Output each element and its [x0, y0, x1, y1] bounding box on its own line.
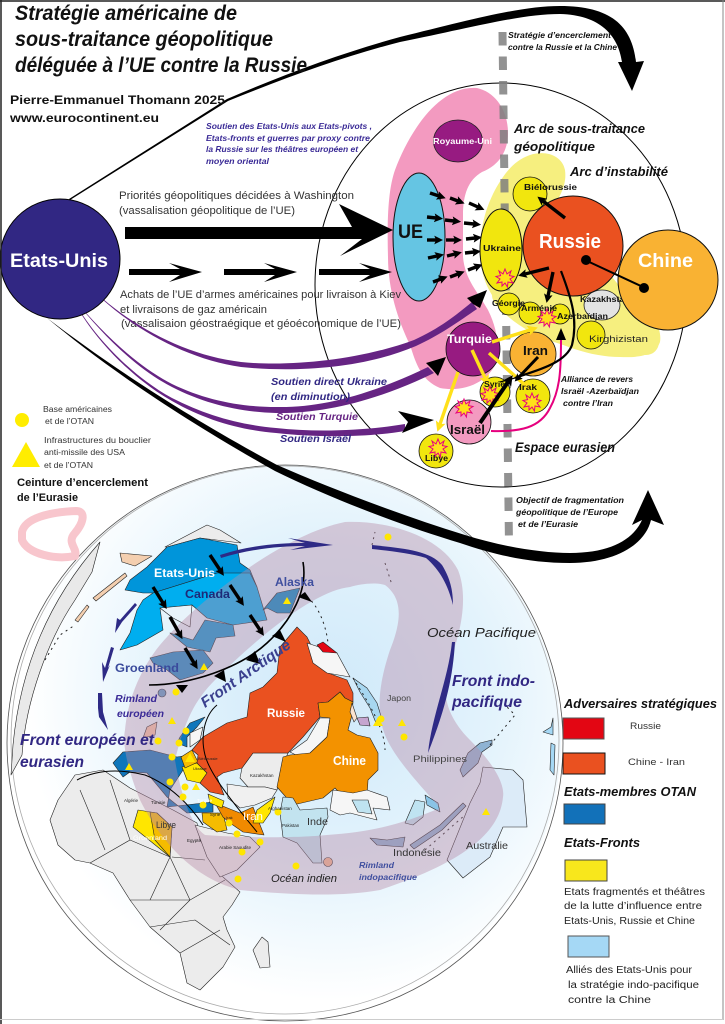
land: Scandinavia	[177, 717, 205, 747]
conflict bursts	[429, 269, 556, 457]
circle labels: Irak	[519, 383, 538, 392]
swatch: front states	[565, 860, 607, 881]
land: Kazakhstan	[240, 753, 288, 790]
map labels: Océan indien	[271, 873, 337, 885]
land: Libya	[133, 810, 172, 857]
small states of the arc	[498, 293, 605, 349]
circle labels: Syrie	[484, 380, 506, 389]
belt legend heading: Ceinture d’encerclement	[17, 477, 148, 489]
actor: Chine: Chine	[638, 251, 693, 272]
arrows: Russia influence	[515, 201, 643, 378]
base label: et de l’OTAN	[45, 417, 94, 426]
note: reverse alliance: Alliance de revers	[560, 374, 633, 384]
land: Siberia east	[307, 643, 350, 677]
Russia China link nodes	[581, 255, 649, 293]
land: Java Sumatra	[370, 837, 405, 847]
shield label: anti-missile des USA	[44, 448, 126, 457]
label: allies: Alliés des Etats-Unis pour	[566, 965, 693, 976]
swatch: Chine Iran	[563, 753, 605, 774]
map labels: Turquie	[197, 798, 213, 803]
map labels: Océan Pacifique	[427, 625, 536, 640]
land: Africa	[50, 770, 240, 990]
author and website: www.eurocontinent.eu	[9, 111, 159, 125]
Eurasian space ellipse	[315, 83, 687, 487]
text: EU purchases: et livraisons de gaz américain	[120, 304, 267, 316]
map labels: Front Arctique	[198, 637, 294, 711]
text: Washington priorities: (vassalisation géopolitique de l’UE)	[119, 205, 295, 217]
bottom encirclement arrow	[47, 318, 664, 563]
map labels: Irak	[226, 815, 233, 820]
land: Caribbean islands	[75, 553, 152, 622]
actor: Israël	[447, 400, 491, 444]
map labels	[20, 566, 536, 885]
arrow: geopolitical priorities	[125, 204, 393, 256]
icon: shield triangle	[12, 442, 40, 467]
top encirclement arrow	[69, 6, 644, 200]
main title: Stratégie américaine de	[15, 2, 237, 25]
land: Iran	[215, 803, 264, 835]
support labels: (en diminution)	[271, 391, 351, 403]
land: Sri Lanka	[324, 858, 332, 866]
land: African borders	[80, 780, 230, 953]
label: Chine Iran: Chine - Iran	[628, 757, 685, 768]
heading: encirclement strategy: contre la Russie et la Chine	[508, 42, 617, 52]
land: Europe NATO	[113, 750, 213, 813]
heading: front states: Etats-Fronts	[564, 835, 640, 850]
land: Alaska	[263, 588, 300, 613]
map labels: Rimland	[359, 861, 395, 870]
map labels: Groenland	[133, 835, 167, 842]
circle labels: Géorgie	[492, 299, 526, 308]
map labels: Inde	[307, 817, 328, 828]
heading: strategic adversaries: Adversaires stratégiques	[563, 696, 717, 711]
map labels: Front européen et	[20, 732, 155, 749]
circle labels: Israël	[450, 422, 485, 437]
land: USA	[125, 538, 257, 593]
map labels: Etats-Unis	[154, 566, 215, 580]
Georgie	[498, 293, 520, 315]
land: Caucasus	[208, 794, 224, 808]
label: front states: Etats fragmentés et théâtres	[564, 887, 705, 898]
actor: Etats-Unis: Etats-Unis	[10, 251, 108, 272]
Eurasian encirclement belt	[124, 522, 503, 895]
subcontracting arc	[388, 88, 508, 389]
support labels: Soutien Israël	[280, 433, 352, 445]
circle labels	[425, 183, 648, 463]
land: Iceland	[158, 689, 166, 697]
actor: UE	[393, 173, 445, 301]
map labels: Canada	[185, 587, 230, 601]
label: allies: contre la Chine	[568, 995, 652, 1006]
land: Philippines	[425, 795, 440, 812]
map labels: Arabie Saoudite	[219, 845, 252, 850]
map labels: Australie	[466, 841, 508, 852]
land: Russia	[192, 627, 353, 795]
swatch: Russie	[563, 718, 604, 739]
land: Papua	[460, 740, 492, 777]
land: Ukraine	[182, 763, 207, 783]
heading: arc of instability: Arc d’instabilité	[569, 164, 668, 179]
heading: Eurasian space: Espace eurasien	[515, 439, 615, 455]
text: EU purchases: (vassalisaion géostraégique et géoéconomique de l’UE)	[121, 318, 401, 330]
circle labels: Arménie	[521, 304, 558, 313]
land: Afghanistan	[253, 797, 275, 823]
map labels: Biélorussie	[198, 756, 218, 761]
note: proxy wars: moyen oriental	[206, 156, 270, 166]
land: Indochina	[330, 790, 390, 820]
actor: Kazakhstan	[580, 290, 630, 320]
map labels: Russie	[267, 706, 305, 720]
arrow: support to Israel	[68, 283, 434, 436]
note: proxy wars: Etats-fronts et guerres par proxy contre	[206, 133, 370, 143]
support labels: Soutien Turquie	[276, 411, 358, 423]
map missile shield: triangles	[125, 597, 490, 815]
shield label: Infrastructures du bouclier	[44, 436, 151, 445]
actor: Ukraine	[480, 209, 522, 291]
land: Belarus	[181, 750, 198, 768]
arc of instability	[481, 153, 660, 357]
actor: Russie	[523, 196, 623, 296]
land: Syria Iraq	[202, 813, 227, 832]
Eurasian front line	[203, 705, 257, 832]
map labels: Kazakhstan	[250, 773, 274, 778]
land: Central Asia	[227, 784, 277, 808]
land masses	[11, 525, 555, 990]
map labels: Groenland	[115, 661, 179, 675]
author and website: Pierre-Emmanuel Thomann 2025	[10, 93, 225, 107]
label: allies: la stratégie indo-pacifique	[568, 980, 699, 991]
Kirghizistan	[577, 321, 605, 349]
base label: Base américaines	[43, 405, 112, 414]
support labels	[271, 376, 387, 445]
land: Chukotka	[317, 642, 337, 653]
map labels: pacifique	[451, 694, 522, 711]
map labels: Pakistan	[282, 823, 300, 828]
map labels: Japon	[387, 694, 411, 703]
arrows: purchases	[129, 263, 392, 282]
globe outlines	[7, 465, 563, 1021]
heading: NATO members: Etats-membres OTAN	[564, 784, 697, 799]
land: Libya east	[150, 812, 172, 857]
land: Madagascar	[253, 937, 270, 968]
text: EU purchases: Achats de l’UE d’armes américaines pour livraison à Kiev	[120, 289, 401, 301]
land: China	[277, 692, 378, 805]
actor: Biélorussie	[513, 177, 547, 211]
map labels: Front indo-	[452, 673, 535, 690]
map labels: Iran	[243, 811, 263, 823]
land: Indonesian chain	[410, 803, 466, 849]
actor: Ukraine: Ukraine	[483, 244, 522, 253]
land: Arabia	[195, 825, 260, 877]
map labels: Indonésie	[393, 848, 441, 859]
heading: subcontracting arc: Arc de sous-traitance	[513, 121, 645, 136]
actor: Royaume-Uni	[433, 120, 492, 162]
globe sea disc	[9, 465, 561, 1017]
arrow: Israel Azerbaijan alliance	[491, 328, 566, 431]
land: Greenland	[150, 650, 213, 680]
arrows: Turkey influence	[440, 330, 530, 424]
swatch: allies	[568, 936, 609, 957]
land: India and Pakistan	[280, 797, 328, 863]
Arctic front line with teeth	[149, 562, 312, 693]
heading: encirclement strategy: Stratégie d’encerclement	[508, 30, 612, 40]
actor: Russie: Russie	[539, 231, 601, 253]
land: New Zealand	[543, 718, 555, 775]
black pressure arrows	[153, 555, 260, 663]
actor: Syrie	[480, 377, 510, 407]
land: Mexico	[165, 525, 241, 547]
actor: Etats-Unis	[0, 199, 120, 319]
land: Australia	[447, 767, 527, 878]
icon: base circle	[15, 413, 29, 427]
actor: Irak	[516, 379, 550, 413]
arrows: EU to Ukraine	[427, 193, 478, 282]
note: fragmentation goal: et de l’Eurasie	[518, 519, 578, 529]
heading: subcontracting arc: géopolitique	[513, 139, 595, 154]
circle labels: Libye	[425, 454, 449, 463]
map labels: Syrie	[210, 812, 221, 817]
arrows: Middle East axis	[480, 357, 538, 423]
note: reverse alliance: contre l’Iran	[563, 398, 613, 408]
map labels: Libye	[156, 820, 176, 830]
map labels: Alaska	[275, 575, 314, 589]
note: fragmentation goal: Objectif de fragmentation	[516, 495, 624, 505]
actor: Chine	[618, 230, 718, 330]
map labels: Algérie	[124, 798, 139, 803]
land: Hudson Bay	[160, 605, 192, 627]
island chains	[45, 532, 515, 850]
geopolitical dividing line	[502, 32, 509, 545]
actor: Kazakhstan: Kazakhstan	[580, 295, 630, 304]
actor: Iran	[510, 332, 556, 376]
label: Russie: Russie	[630, 721, 661, 732]
European front line	[77, 771, 203, 825]
Azerbaïdjan	[550, 304, 570, 324]
arrow: direct support to Ukraine	[80, 277, 487, 369]
map labels: Ukraine	[193, 766, 208, 771]
note: proxy wars: la Russie sur les théâtres européen et	[206, 144, 359, 154]
land: Mongolia	[290, 718, 330, 757]
map labels: Rimland	[115, 694, 158, 705]
map labels: eurasien	[20, 754, 84, 771]
land: Canada	[120, 573, 267, 650]
note: fragmentation goal: géopolitique de l’Europe	[515, 507, 618, 517]
label: front states: Etats-Unis, Russie et Chine	[564, 916, 695, 927]
map labels: Tunisie	[151, 800, 166, 805]
support labels: Soutien direct Ukraine	[271, 376, 387, 388]
map labels: Philippines	[413, 754, 467, 765]
map labels: Chine	[333, 753, 366, 768]
land: Arctic islands	[170, 620, 235, 652]
legend: map colours	[563, 696, 717, 1006]
map: polar world globe	[7, 465, 563, 1021]
circle labels: Biélorussie	[524, 183, 578, 192]
actor: Turquie	[446, 322, 500, 376]
note: reverse alliance: Israël -Azerbaïdjan	[561, 386, 639, 396]
land: Japan	[353, 678, 381, 723]
main title: sous-traitance géopolitique	[15, 28, 273, 51]
map labels: Afghanistan	[268, 806, 292, 811]
belt legend heading: de l’Eurasie	[17, 492, 78, 504]
map labels: indopacifique	[359, 873, 418, 882]
actor: Royaume-Uni: Royaume-Uni	[433, 137, 492, 146]
land: South America	[11, 542, 100, 775]
actor: UE: UE	[398, 222, 423, 243]
legend: base and shield symbols	[12, 405, 151, 557]
map labels: Egypte	[187, 838, 202, 843]
arc of instability: lower arm	[505, 295, 646, 342]
map labels: européen	[117, 709, 164, 720]
circle labels: Iran	[523, 343, 548, 358]
navy strategy arrows	[98, 538, 455, 753]
shield label: et de l’OTAN	[44, 461, 93, 470]
land: Korea	[350, 703, 357, 722]
text: Washington priorities: Priorités géopolitiques décidées à Washington	[119, 190, 354, 202]
land: Finland	[190, 727, 203, 747]
label: front states: de la lutte d’influence entre	[564, 901, 703, 912]
Arménie	[519, 302, 541, 324]
land: North Korea	[357, 717, 370, 726]
note: proxy wars: Soutien des Etats-Unis aux Etats-pivots ,	[206, 121, 372, 131]
circle labels: Turquie	[447, 334, 492, 346]
circle labels: Azerbaïdjan	[557, 312, 608, 321]
map bases: circles	[154, 534, 408, 882]
icon: belt swatch	[22, 511, 83, 557]
actor: Libye	[419, 434, 453, 468]
swatch: NATO	[564, 804, 605, 824]
main title: déléguée à l’UE contre la Russie	[15, 54, 307, 77]
land: Britain	[143, 722, 157, 738]
arrow: support to Turkey	[75, 300, 446, 413]
circle labels: Kirghizistan	[589, 334, 648, 345]
land: Thailand	[352, 800, 372, 814]
panel: Eurasian space circle	[315, 32, 687, 545]
land: Borneo	[405, 800, 425, 825]
